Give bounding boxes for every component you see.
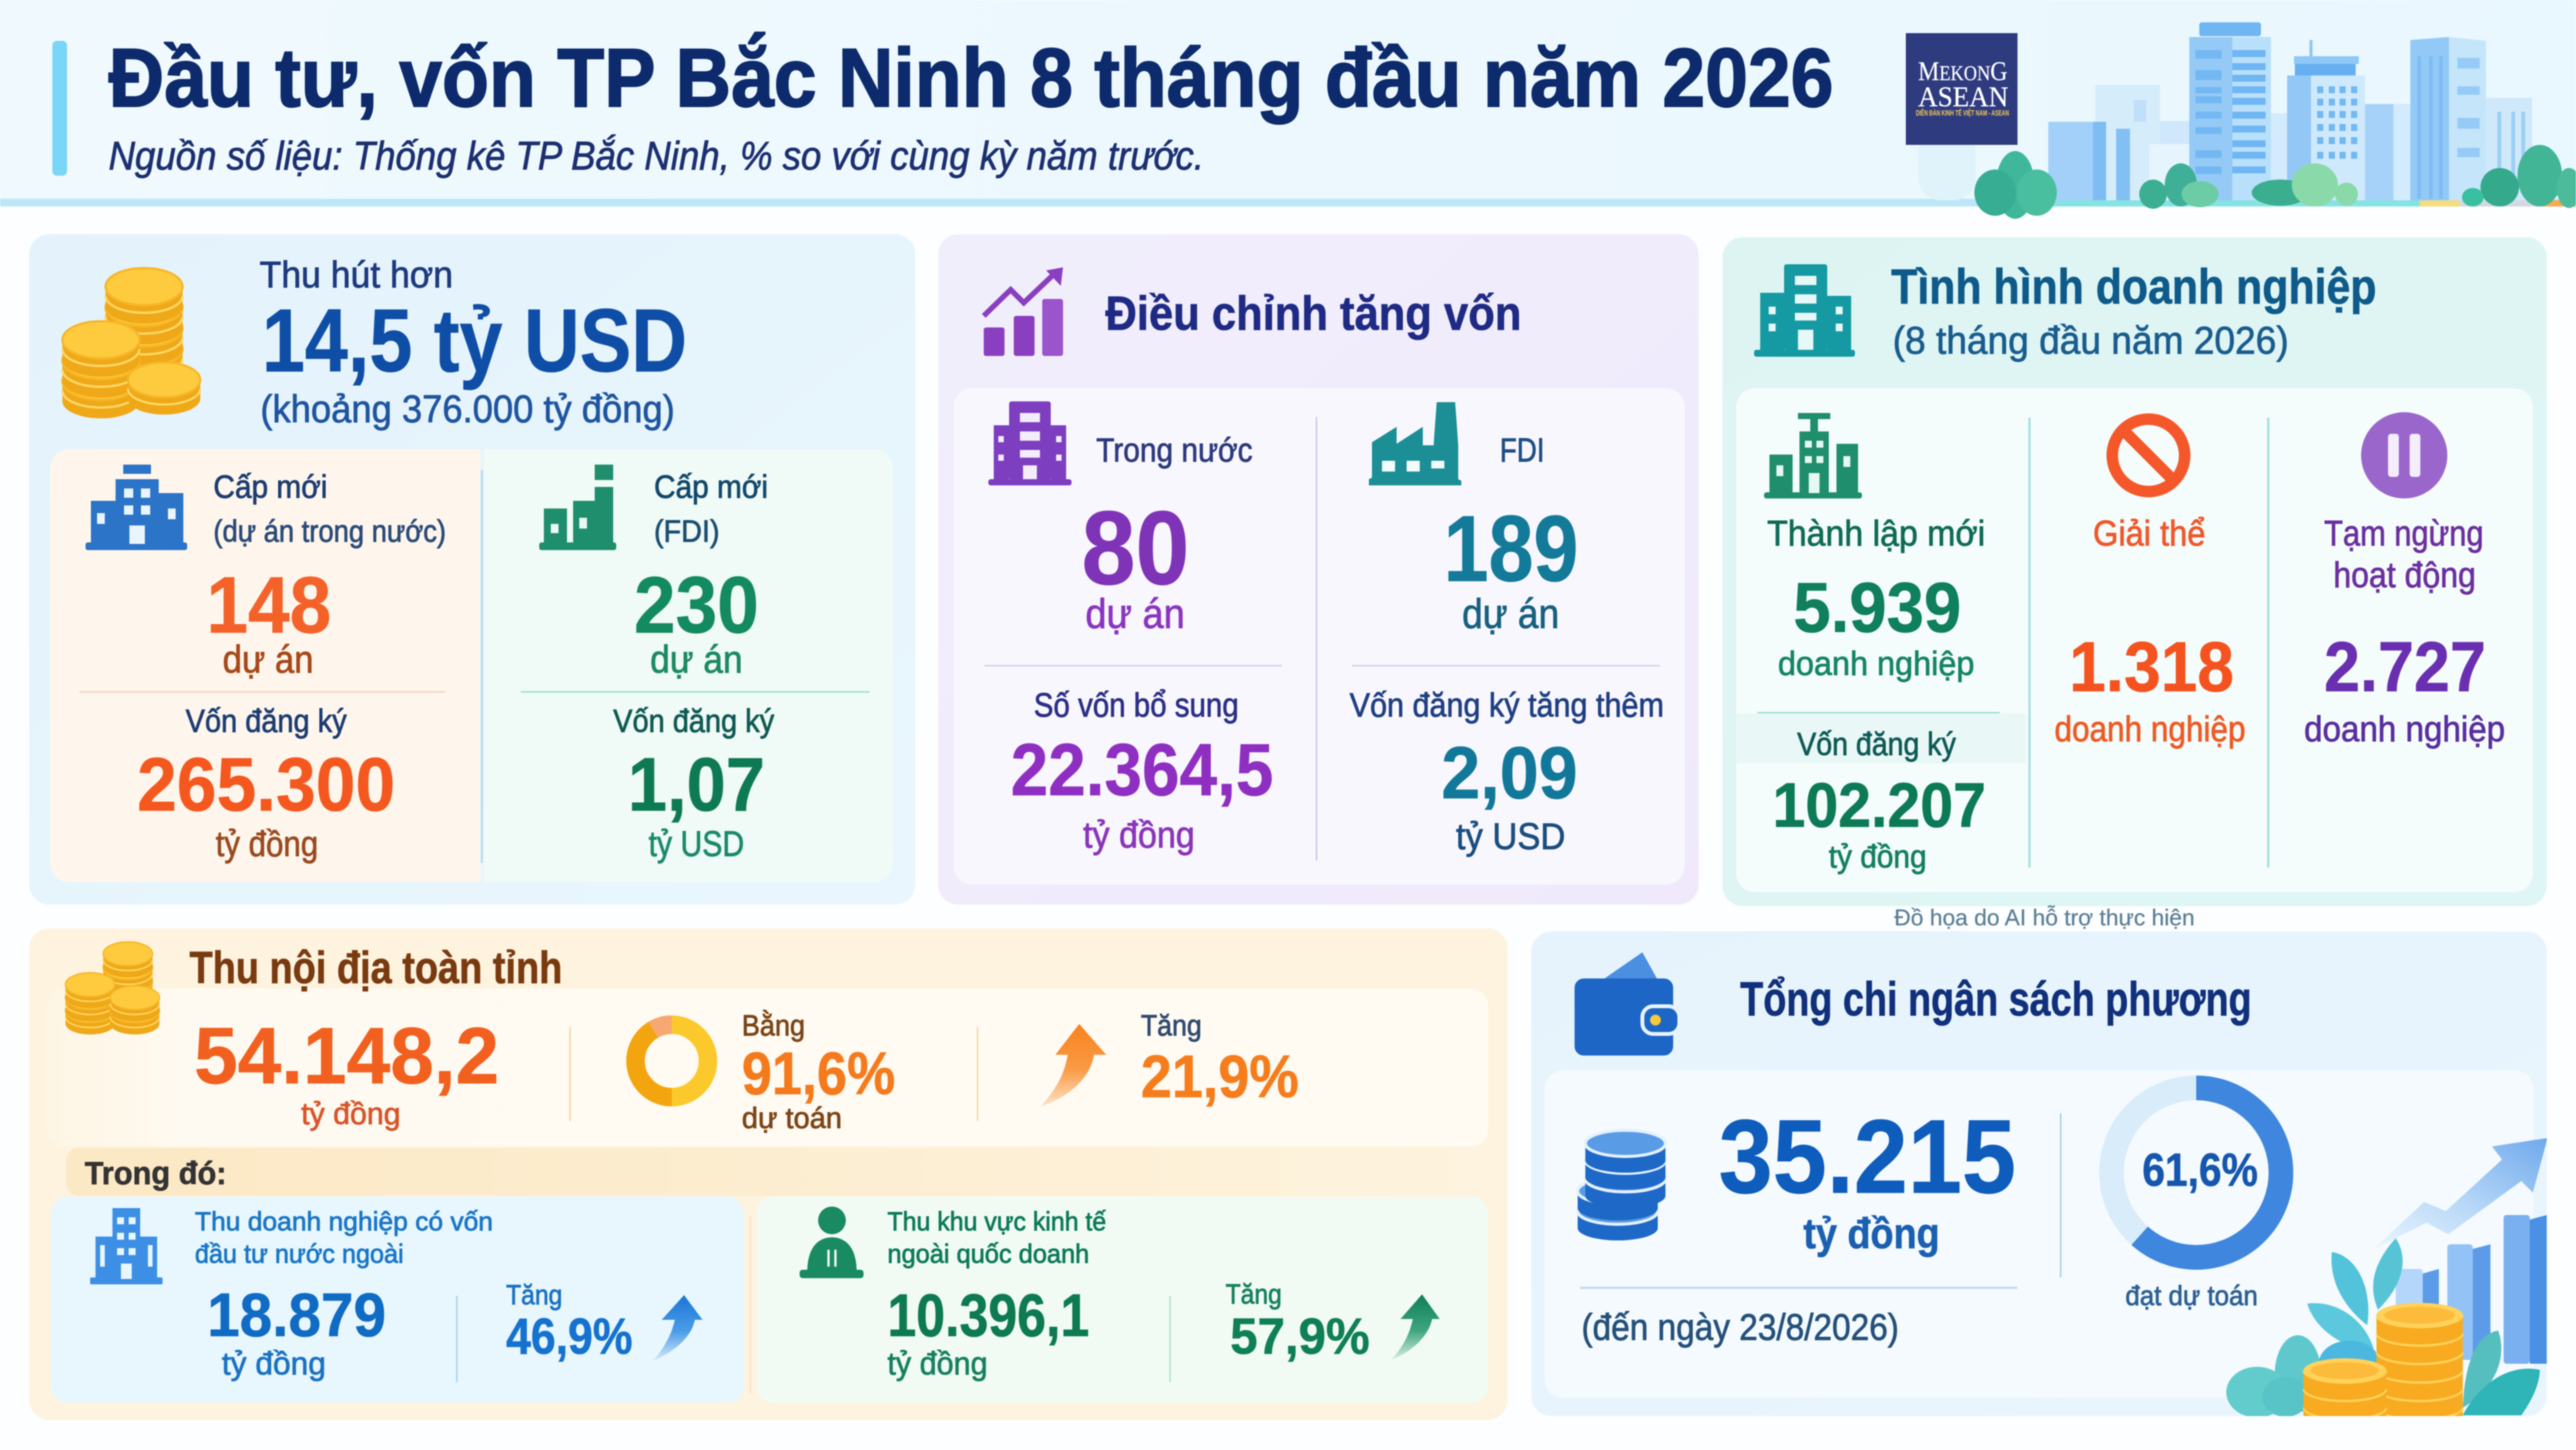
text: attraction total: Thu hút hơn	[260, 255, 453, 296]
card: non-state sector revenue: Tăng	[1226, 1278, 1282, 1310]
column: newly established: tỷ đồng	[1829, 838, 1927, 874]
subtitle: Nguồn số liệu: Thống kê TP Bắc Ninh, % so với cùng kỳ năm trước.	[109, 134, 1204, 179]
heading: (8 tháng đầu năm 2026)	[1893, 319, 2289, 362]
title: Đầu tư, vốn TP Bắc Ninh 8 tháng đầu năm 2026	[109, 31, 1833, 124]
city skyline illustration	[1918, 22, 2576, 219]
heading: Thu nội địa toàn tỉnh	[190, 943, 562, 993]
inner card: FDI	[1500, 431, 1545, 469]
text: date: (đến ngày 23/8/2026)	[1581, 1307, 1899, 1348]
card: non-state sector revenue: 57,9%	[1230, 1307, 1370, 1364]
heading: Tổng chi ngân sách phương	[1740, 973, 2252, 1026]
inner card: Số vốn bổ sung	[1034, 686, 1239, 724]
donut: 61.6% of estimate: đạt dự toán	[2125, 1280, 2258, 1311]
stat: total spending	[1719, 1098, 2016, 1257]
donut: 91.6% of estimate	[636, 1025, 708, 1097]
inner card: Vốn đăng ký tăng thêm	[1350, 686, 1664, 724]
inner card: 189	[1444, 496, 1578, 601]
donut: 61.6% of estimate: 61,6%	[2142, 1144, 2258, 1196]
column: dissolved: Giải thể	[2093, 513, 2205, 553]
icon: coin stacks	[65, 942, 159, 1035]
icon: teal factory	[1369, 402, 1461, 485]
logo: Mekong Asean: MEKONG	[1918, 56, 2007, 86]
sub-panel: domestic new projects: (dự án trong nước)	[213, 515, 446, 549]
inner card	[1736, 388, 2533, 892]
card: non-state sector revenue: tỷ đồng	[887, 1345, 988, 1381]
subheading: of which: Trong đó:	[85, 1155, 226, 1191]
logo: Mekong Asean: ASEAN	[1918, 82, 2008, 113]
card: non-state sector revenue: ngoài quốc doanh	[887, 1240, 1089, 1269]
stat: total spending: 35.215	[1719, 1098, 2016, 1215]
sub-panel: FDI new projects: dự án	[650, 638, 743, 681]
logo: Mekong Asean	[1906, 33, 2018, 145]
panel: domestic revenue	[29, 928, 1508, 1420]
sub-panel: domestic new projects: 148	[206, 561, 331, 650]
column: newly established	[1764, 413, 1986, 874]
icon: orange up arrow	[1041, 1024, 1106, 1106]
page header	[0, 0, 2576, 219]
panel: business situation	[1722, 237, 2547, 906]
panel: local budget spending	[1531, 931, 2547, 1437]
column: suspended: Tạm ngừng	[2324, 513, 2484, 553]
inner card: tỷ USD	[1456, 817, 1565, 858]
column: dissolved: 1.318	[2069, 628, 2234, 707]
sub-panel: FDI new projects	[481, 449, 893, 882]
inner card	[954, 388, 1685, 884]
sub-panel: domestic new projects: Vốn đăng ký	[186, 703, 347, 739]
stat: growth	[1141, 1010, 1299, 1110]
stat: percent of estimate: dự toán	[742, 1103, 842, 1135]
trees	[1974, 145, 2576, 219]
icon: blue office building	[86, 465, 187, 550]
icon: blue wallet	[1575, 952, 1679, 1056]
card: FDI enterprise revenue: Tăng	[506, 1279, 562, 1311]
inner card	[1545, 1070, 2534, 1398]
sub-panel: domestic new projects: tỷ đồng	[216, 824, 318, 864]
stat: percent of estimate: 91,6%	[742, 1039, 895, 1107]
sub-panel: FDI new projects: (FDI)	[654, 515, 719, 549]
sub-panel: FDI new projects: tỷ USD	[649, 824, 744, 864]
inner card: 80	[1082, 489, 1189, 606]
stat: growth: Tăng	[1141, 1010, 1202, 1042]
card: non-state sector revenue: 10.396,1	[887, 1281, 1089, 1349]
stat: growth: 21,9%	[1141, 1042, 1299, 1110]
stat: total spending: tỷ đồng	[1803, 1209, 1940, 1257]
text: attraction total: (khoảng 376.000 tỷ đồng)	[260, 388, 675, 431]
inner card: 22.364,5	[1011, 729, 1273, 811]
column: newly established: doanh nghiệp	[1778, 645, 1974, 683]
sub-panel: FDI new projects: 1,07	[628, 742, 765, 827]
text: attraction total: 14,5 tỷ USD	[262, 290, 687, 391]
card: non-state sector revenue	[756, 1197, 1488, 1403]
column: suspended	[2304, 412, 2505, 749]
sub-panel: domestic new projects: 265.300	[137, 742, 395, 827]
donut: 61.6% of estimate	[2111, 1088, 2281, 1311]
inner card: dự án	[1462, 591, 1559, 637]
inner card: dự án	[1085, 591, 1185, 637]
icon: blue tower	[90, 1208, 163, 1284]
sub-panel: FDI new projects: Vốn đăng ký	[613, 703, 774, 739]
column: newly established: Vốn đăng ký	[1797, 726, 1956, 762]
column: suspended: 2.727	[2324, 628, 2486, 707]
icon: person with desk	[800, 1207, 864, 1278]
heading: Điều chỉnh tăng vốn	[1105, 287, 1521, 341]
icon: purple building	[988, 401, 1072, 485]
stat: percent of estimate: Bằng	[742, 1009, 805, 1042]
column: dissolved	[2054, 419, 2246, 749]
icon: gold coins	[62, 268, 200, 418]
column: newly established: 102.207	[1773, 770, 1986, 841]
subheading: of which	[66, 1148, 1488, 1196]
text: attraction total	[260, 255, 687, 431]
sub-panel: domestic new projects: Cấp mới	[213, 468, 327, 505]
icon: purple rising chart	[984, 267, 1063, 356]
sub-panel: FDI new projects: Cấp mới	[654, 468, 768, 505]
inner card: tỷ đồng	[1083, 815, 1195, 856]
accent bar	[52, 41, 67, 176]
card: FDI enterprise revenue: 18.879	[207, 1280, 386, 1349]
icon: green factory	[539, 465, 616, 550]
note: AI credit: Đồ họa do AI hỗ trợ thực hiện	[1894, 905, 2195, 931]
card: FDI enterprise revenue: Thu doanh nghiệp có vốn	[195, 1207, 493, 1237]
icon: blue up arrow	[653, 1295, 703, 1361]
icon: blue coin stack	[1578, 1130, 1665, 1240]
icon: teal office building	[1754, 264, 1855, 357]
inner card: 2,09	[1441, 732, 1578, 814]
icon: green up arrow	[1391, 1294, 1440, 1360]
column: newly established: 5.939	[1793, 569, 1961, 647]
main revenue card	[46, 988, 1488, 1146]
sub-panel: FDI new projects: 230	[634, 561, 759, 650]
heading	[1891, 259, 2376, 362]
sub-panel: domestic new projects: dự án	[223, 638, 314, 681]
column: suspended: hoạt động	[2333, 555, 2476, 595]
logo: Mekong Asean: DIỄN ĐÀN KINH TẾ VIỆT NAM - ASEAN	[1916, 108, 2009, 118]
card: non-state sector revenue: Thu khu vực kinh tế	[887, 1207, 1106, 1237]
panel: capital increase	[938, 234, 1699, 905]
sub-panel: domestic new projects	[50, 449, 481, 882]
heading: Tình hình doanh nghiệp	[1891, 259, 2376, 314]
stat: revenue total: 54.148,2	[194, 1012, 499, 1101]
column: suspended: doanh nghiệp	[2304, 709, 2505, 749]
card: FDI enterprise revenue: tỷ đồng	[222, 1345, 326, 1381]
column: dissolved: doanh nghiệp	[2054, 709, 2246, 749]
inner card: Trong nước	[1096, 431, 1253, 469]
card: FDI enterprise revenue: 46,9%	[506, 1307, 632, 1364]
stat: percent of estimate	[742, 1009, 895, 1135]
decoration: growth bars, arrow, coins, leaves	[2226, 1138, 2547, 1437]
stat: revenue total: tỷ đồng	[301, 1097, 401, 1131]
card: FDI enterprise revenue	[51, 1197, 744, 1403]
column: newly established: Thành lập mới	[1767, 513, 1985, 553]
card: FDI enterprise revenue: đầu tư nước ngoài	[195, 1240, 404, 1269]
panel: investment attraction	[29, 234, 915, 905]
